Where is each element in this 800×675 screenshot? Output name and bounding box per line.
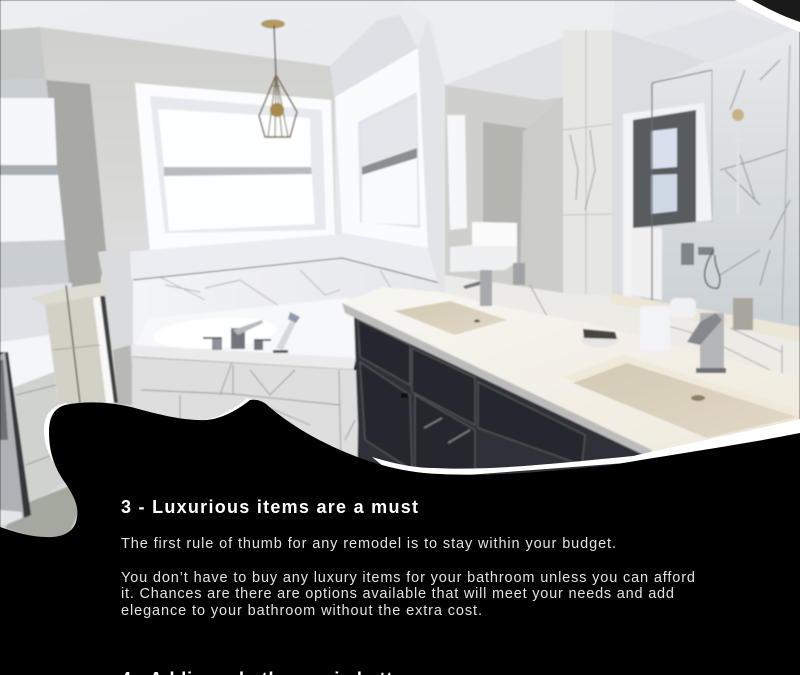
central window (135, 83, 335, 252)
photo: bathroom scene (0, 0, 800, 540)
left glass wall top (0, 27, 46, 80)
mirror ceiling reflection (642, 10, 793, 63)
pendant light (259, 20, 297, 137)
tub skirt marble (132, 357, 358, 470)
tub marble backsplash (133, 258, 440, 345)
text block: second paragraph: You don’t have to buy any luxury items for your bathroom unless you can afford (121, 570, 695, 586)
text block: second paragraph: elegance to your bathroom without the extra cost. (121, 603, 482, 619)
lower left shower area (0, 283, 80, 540)
left lower backdrop (0, 280, 140, 540)
wall between column and shower (612, 30, 710, 296)
sink right rim (563, 355, 800, 438)
countertop (342, 287, 800, 458)
shower door chrome handle (0, 352, 31, 527)
sink left (394, 301, 507, 335)
marble wall above mirrors (400, 0, 615, 85)
tub faucet (203, 312, 300, 353)
half wall (98, 248, 136, 405)
soap dish and cup (581, 298, 696, 351)
marble column (563, 30, 612, 302)
marble wall beside mirror (418, 20, 446, 290)
mirror: left reflection (445, 38, 563, 293)
ceiling (0, 0, 800, 300)
shower post (31, 282, 114, 410)
rear wall (40, 27, 335, 260)
shower door frame and window (623, 70, 712, 302)
shower fixtures (681, 109, 745, 288)
mirror lower band and backsplash (445, 275, 800, 390)
black wave panel with white edge (0, 398, 800, 675)
heading: section 3: 3 - Luxurious items are a must (121, 497, 418, 517)
vanity cabinets (354, 316, 650, 480)
text block: first paragraph: The first rule of thumb for any remodel is to stay within your budget. (121, 536, 616, 552)
text block: second paragraph: it. Chances are there are options available that will meet your needs and add (121, 586, 674, 602)
white edge: left (44, 403, 100, 537)
niche pillar (46, 80, 106, 290)
tub deck (132, 298, 356, 370)
white edge: middle (205, 398, 256, 432)
left window (0, 78, 70, 295)
wall above tub (125, 234, 440, 284)
shower marble (640, 40, 800, 335)
right window (335, 48, 428, 248)
white edge: right (372, 419, 800, 480)
text block: second paragraph (121, 570, 695, 619)
wall above right window (330, 15, 418, 97)
black panel (0, 400, 800, 675)
sink right basin (573, 363, 797, 438)
faucets (463, 263, 753, 373)
top-right curved corner (735, 0, 800, 32)
